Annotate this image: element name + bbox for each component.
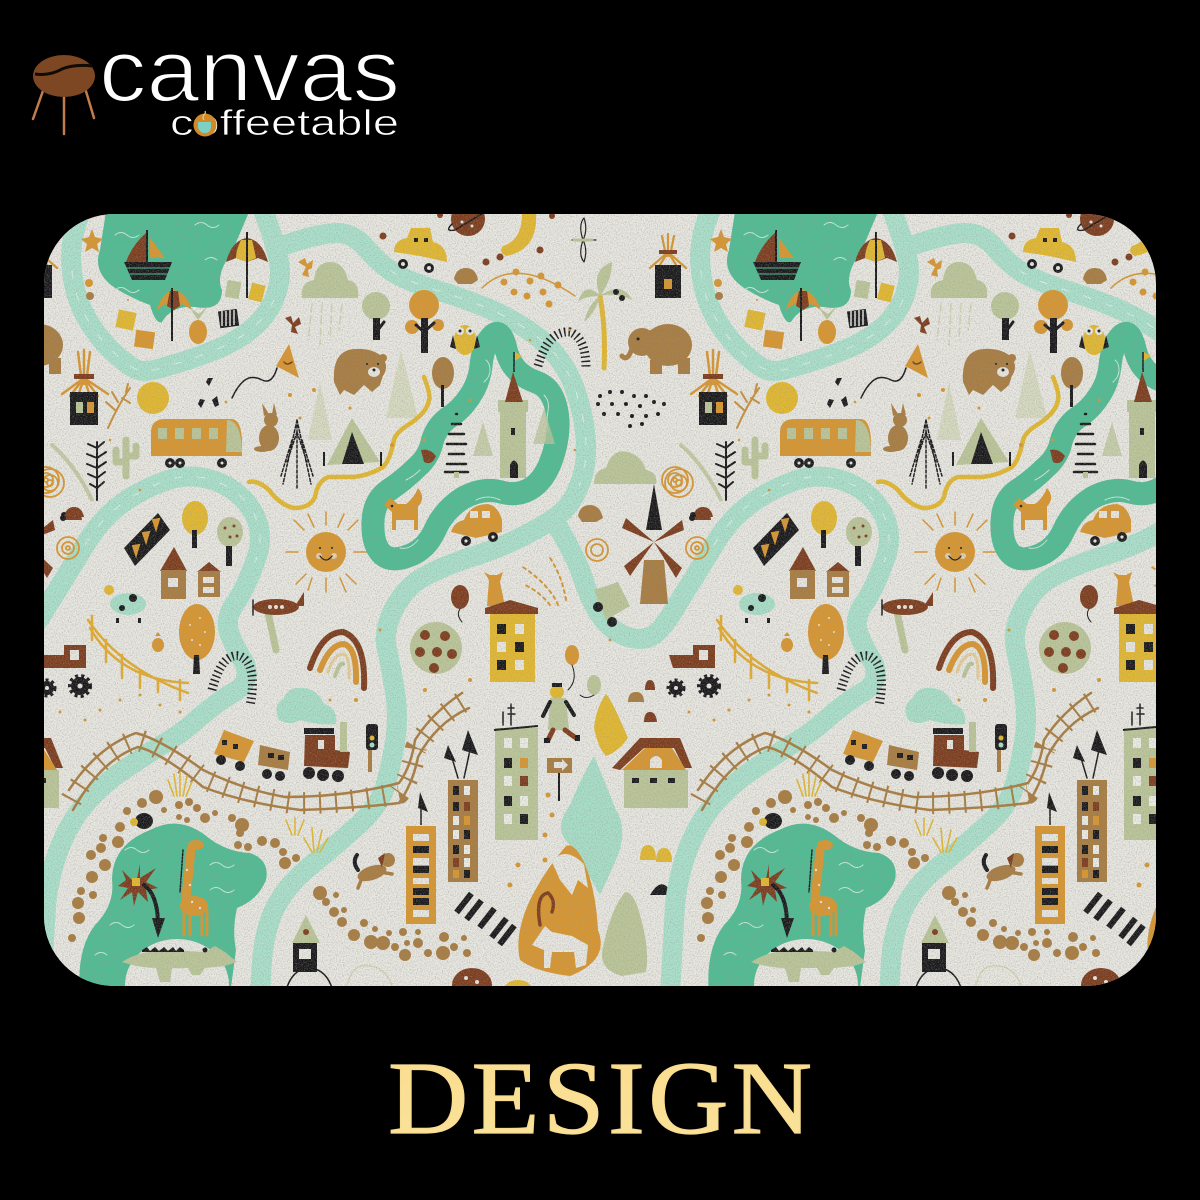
panel: printed rug map [44, 214, 1156, 986]
repeating map tile [36, 202, 711, 1031]
building: brown with dishes [444, 730, 478, 882]
rainbow [310, 632, 364, 688]
crescent moon [501, 214, 536, 256]
lake: top left [98, 205, 252, 322]
palm tree [578, 262, 632, 368]
lake ripples [95, 222, 234, 955]
windmill [622, 484, 684, 604]
fabric texture [44, 214, 1156, 986]
beach mats and pineapple [85, 279, 266, 349]
crosswalk [454, 892, 517, 946]
icon: coffee cup badge [194, 111, 216, 136]
icon: beach umbrella 1 [226, 232, 268, 298]
hedgehogs [454, 268, 603, 522]
red barn [612, 738, 692, 808]
icon: coffee bean table [33, 55, 95, 134]
dog [355, 853, 395, 888]
carrot board [124, 513, 170, 566]
fern black [87, 442, 106, 500]
boy with balloons [543, 645, 601, 743]
hut: top [650, 234, 686, 298]
rainbow of tracks [482, 268, 575, 308]
turtle [130, 813, 153, 829]
cloud: mint [276, 688, 336, 724]
elephant [622, 324, 692, 374]
scattered confetti dots [58, 299, 612, 888]
sage fern [52, 445, 92, 500]
mountain: orange with goat [518, 845, 601, 976]
river ripples [400, 360, 548, 548]
icon: beach umbrella 2 [157, 288, 192, 341]
icon: sailboat [124, 230, 172, 280]
car: orange [451, 504, 502, 546]
ladybug [61, 507, 84, 518]
stepping stones [68, 790, 471, 961]
lake: bottom left [79, 824, 267, 995]
dragonfly [572, 218, 596, 262]
small domes [628, 680, 672, 895]
crocodile [122, 946, 237, 982]
pine: black line [281, 420, 313, 488]
road: ring around lake [71, 205, 280, 371]
owl [450, 325, 480, 355]
tree: sage [362, 292, 390, 340]
fox [384, 488, 422, 530]
small house [292, 915, 320, 972]
road: main winding road [260, 233, 586, 995]
firework [520, 555, 566, 605]
heading: DESIGN: DESIGN [388, 1041, 815, 1156]
green river loop [373, 333, 558, 559]
spirals [36, 467, 688, 561]
fence [88, 616, 188, 700]
logo word: coffeetable: coffeetable [170, 102, 399, 143]
castle [498, 352, 528, 478]
sprig [106, 384, 130, 428]
tent [324, 418, 381, 466]
cloud and rain [302, 262, 358, 345]
map tile repeated left [0, 202, 82, 1031]
bus [151, 419, 242, 468]
yellow path [249, 377, 429, 508]
cow [104, 585, 146, 623]
red stars [380, 212, 555, 266]
domes bottom [285, 966, 395, 995]
yellow dome [504, 980, 532, 1000]
mountain: mint [561, 756, 622, 895]
trees: yellow and apple [182, 501, 243, 566]
sage pines [308, 350, 555, 456]
logo: canvas coffeetable [33, 21, 400, 143]
building: yellow [485, 600, 538, 682]
brown turtle [452, 968, 492, 1002]
yellow bush [137, 382, 169, 414]
rabbit [254, 403, 279, 452]
building: sage [494, 704, 538, 840]
balloon and cat [451, 572, 505, 622]
bear [334, 349, 387, 395]
cactus [116, 440, 136, 476]
sign post [547, 758, 572, 801]
road: branch to windmill [554, 520, 680, 639]
plane [253, 592, 304, 650]
map tile repeated right [665, 202, 1200, 1031]
train [214, 722, 350, 782]
logo word: canvas: canvas [99, 21, 400, 120]
flower bush [410, 622, 462, 674]
giraffe [180, 840, 208, 935]
car: yellow [394, 228, 447, 273]
chick [152, 632, 164, 652]
road: left loop [41, 476, 260, 995]
kite [232, 344, 299, 398]
road centre dashes [72, 271, 586, 562]
ladybug right [689, 510, 711, 521]
starfish [81, 229, 103, 252]
grass tufts [168, 772, 328, 852]
traffic light [366, 724, 378, 772]
butterflies [285, 258, 313, 334]
tree: big orange [179, 604, 215, 674]
arch: black ladder left [538, 332, 586, 368]
railway [69, 693, 469, 810]
houses [160, 547, 221, 599]
sun [286, 512, 366, 592]
planet [449, 202, 485, 236]
black tracks [596, 390, 666, 428]
building: orange with dish [406, 792, 436, 924]
tractor [39, 645, 90, 696]
island under crocodile [125, 939, 229, 1031]
mountain: sage [602, 892, 647, 976]
toy truck [593, 582, 630, 627]
tree: orange [405, 290, 444, 353]
pine: black striped [445, 414, 468, 478]
arch: black ladder right [212, 656, 252, 706]
mountain: yellow [594, 694, 628, 756]
palm on island [118, 864, 165, 938]
birds [198, 378, 219, 408]
tree: brown [432, 357, 454, 407]
hut [62, 350, 108, 425]
cloud: sage center [594, 451, 656, 484]
duck [421, 450, 436, 463]
